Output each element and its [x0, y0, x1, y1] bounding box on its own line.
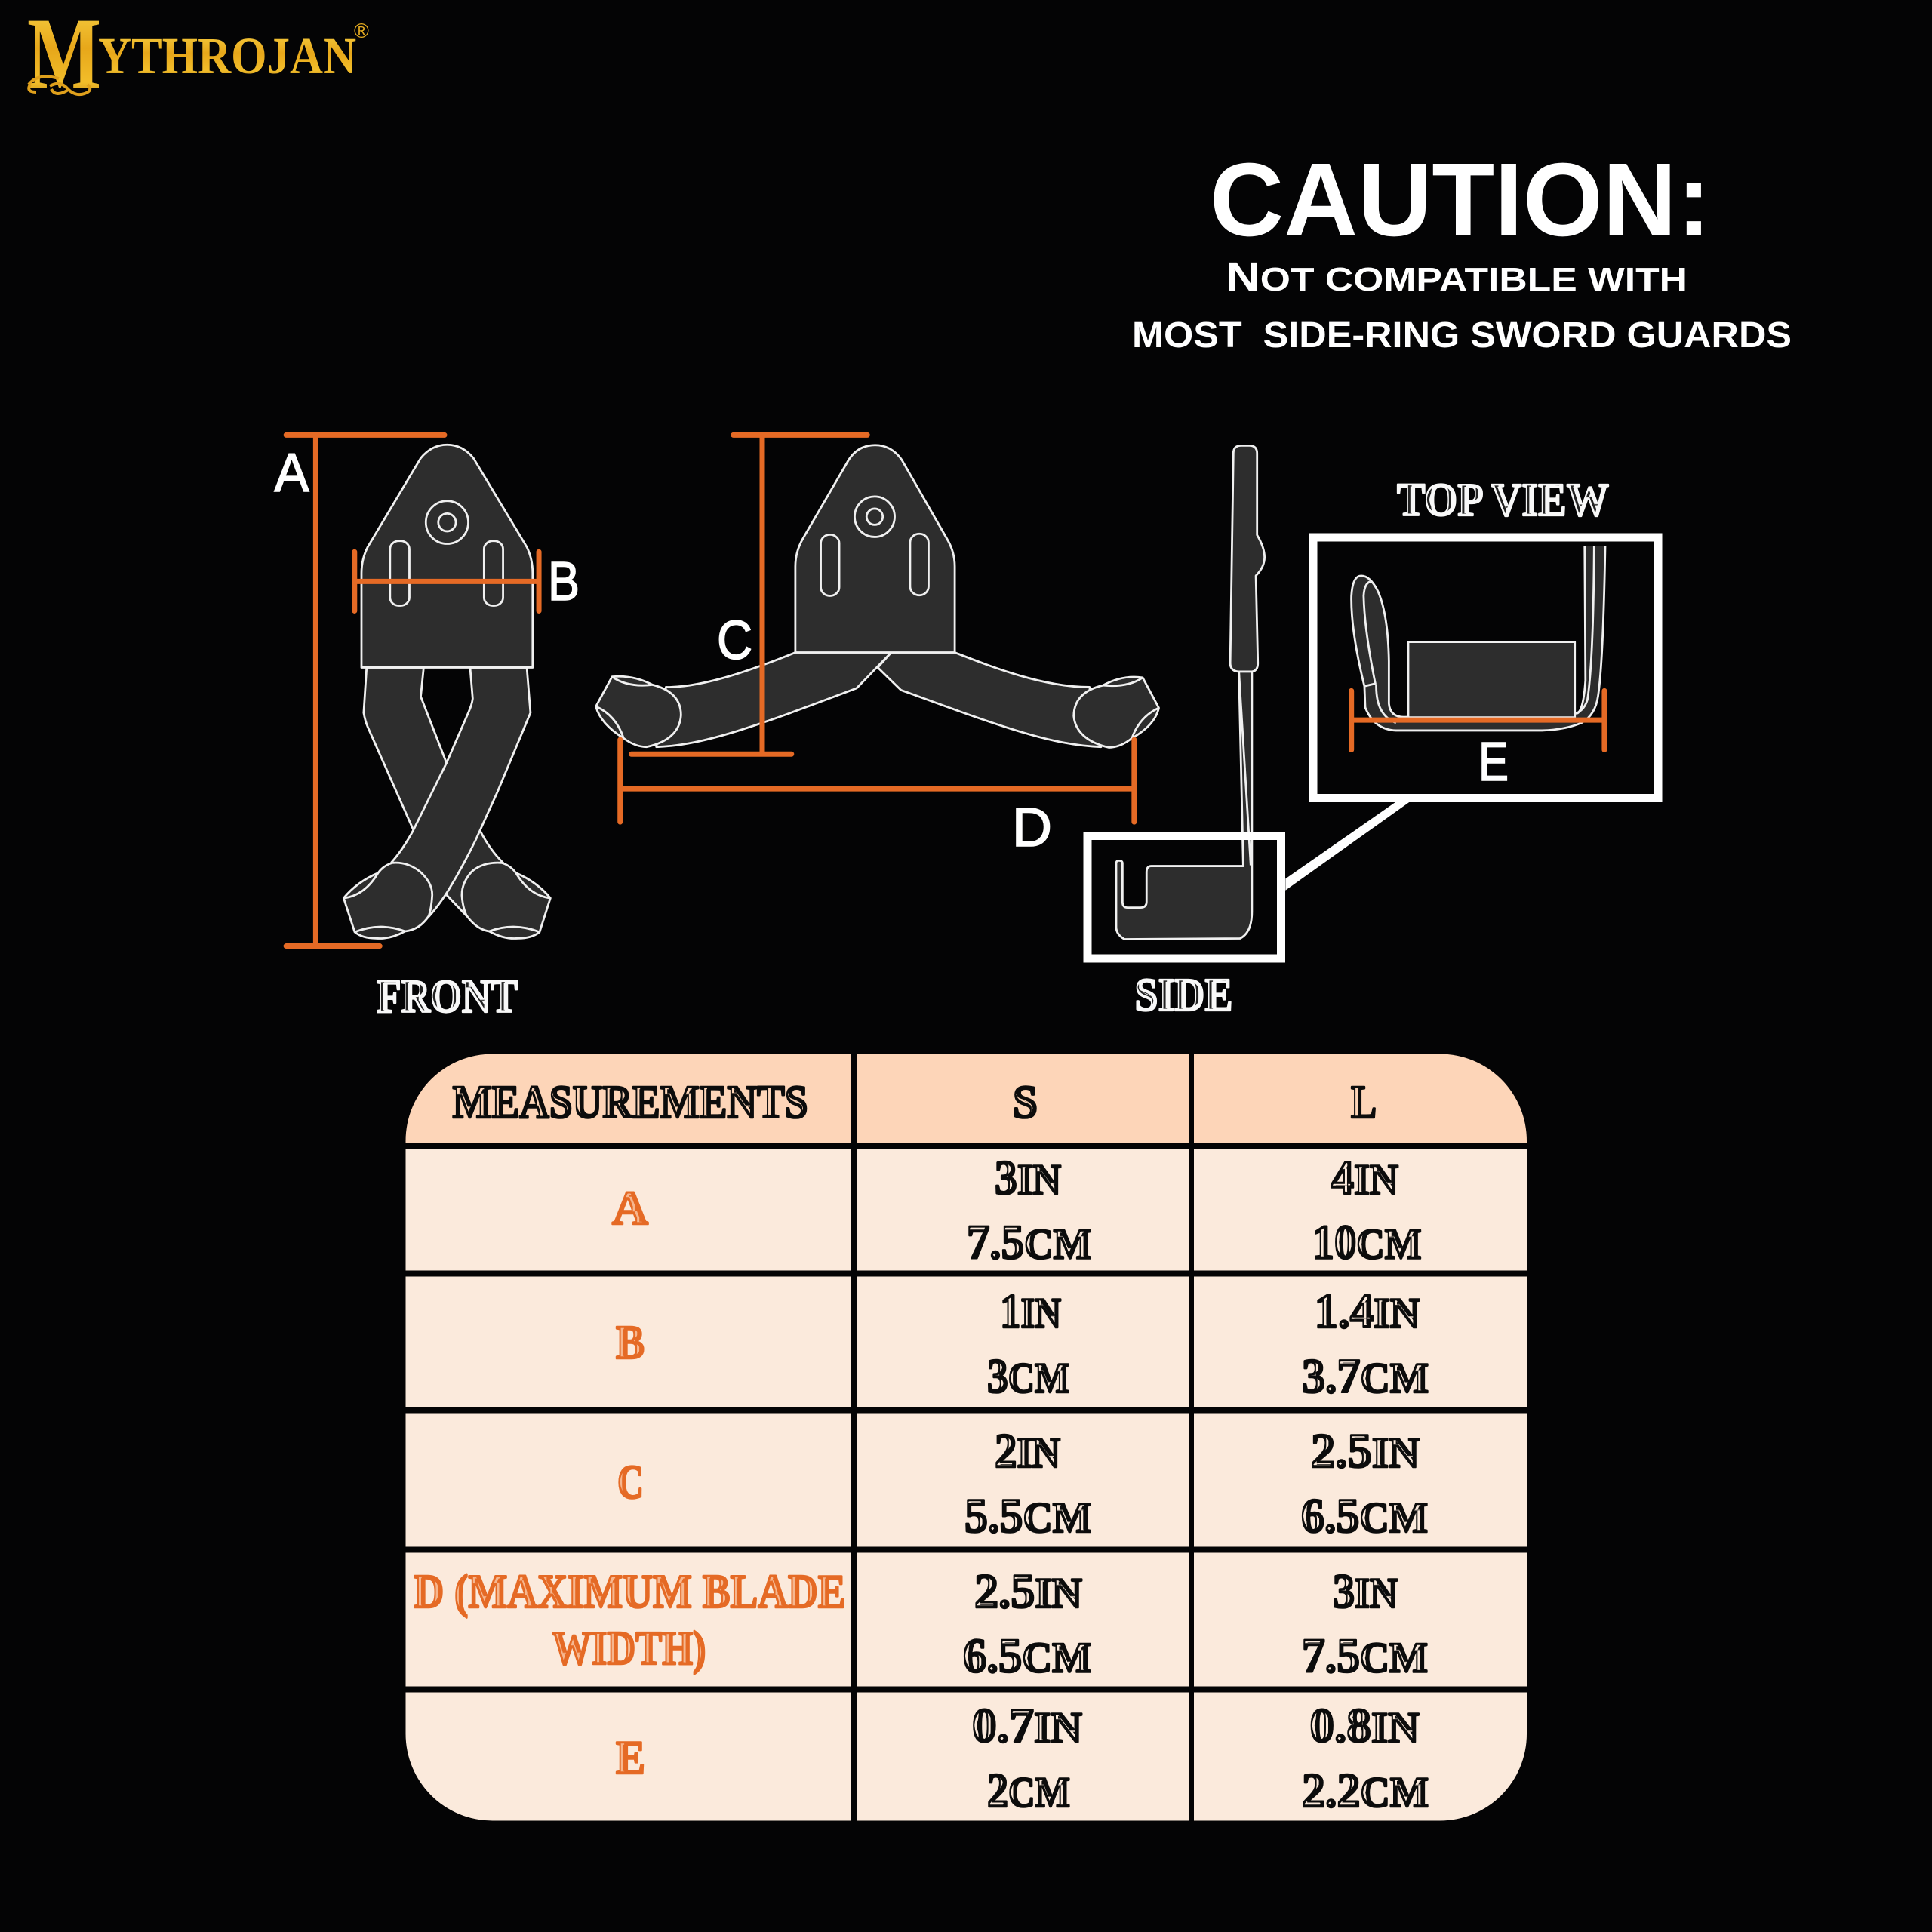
detail box: top view — [1313, 537, 1658, 798]
values: B, S: 1IN — [1000, 1284, 1061, 1339]
values: D, S: 2.5IN — [974, 1564, 1082, 1619]
header: S: S — [1013, 1077, 1038, 1128]
logo: Mythrojan: M — [27, 0, 101, 110]
dimension C — [632, 435, 867, 754]
row label: B: B — [616, 1315, 645, 1369]
row label: E: E — [616, 1730, 645, 1784]
letter D: D — [1012, 798, 1052, 858]
values: E, L — [1302, 1699, 1429, 1818]
values: A, L — [1312, 1151, 1422, 1269]
header: measurements: MEASUREMENTS — [453, 1077, 808, 1128]
right arm — [878, 653, 1101, 747]
values: E, L: 2.2CM — [1302, 1764, 1429, 1818]
left arm — [657, 653, 891, 747]
table: measurements — [405, 1054, 1527, 1822]
left foot — [343, 863, 432, 939]
values: B, S: 3CM — [987, 1349, 1069, 1404]
values: C, L: 2.5IN — [1311, 1424, 1420, 1478]
row label: A: A — [612, 1181, 648, 1235]
logo: Mythrojan: YTHROJAN — [98, 27, 356, 85]
diagram: open view — [596, 435, 1159, 822]
letter A: A — [275, 443, 309, 503]
values: B, L: 1.4IN — [1315, 1284, 1420, 1339]
values: C, S: 2IN — [995, 1424, 1060, 1478]
values: C, L — [1301, 1424, 1428, 1543]
values: D, S: 6.5CM — [963, 1629, 1091, 1683]
caution text line 2: MOST SIDE-RING SWORD GUARDS — [1132, 315, 1792, 355]
values: D, L — [1302, 1564, 1428, 1683]
values: D, S — [963, 1564, 1091, 1683]
back strap — [364, 667, 519, 917]
values: E, S — [972, 1699, 1082, 1818]
values: A, L: 10CM — [1312, 1215, 1422, 1269]
values: E, S: 2CM — [987, 1764, 1070, 1818]
rivet — [854, 497, 895, 537]
values: B, L: 3.7CM — [1302, 1349, 1429, 1404]
logo: Mythrojan — [27, 0, 369, 110]
connector between detail boxes — [1285, 801, 1410, 891]
diagram: front view — [286, 435, 550, 946]
dimension E — [1352, 691, 1604, 749]
letter C: C — [717, 611, 752, 671]
letter E: E — [1478, 732, 1509, 792]
row label: C: C — [617, 1455, 644, 1509]
caution heading: CAUTION: — [1210, 142, 1711, 258]
dimension D — [620, 740, 1134, 822]
values: B, L — [1302, 1284, 1429, 1404]
header: L: L — [1351, 1077, 1377, 1128]
values: D, L: 3IN — [1333, 1564, 1398, 1619]
row label: D: WIDTH) — [552, 1621, 706, 1675]
values: A, S: 3IN — [995, 1151, 1061, 1205]
values: B, S — [987, 1284, 1069, 1404]
diagram: side view and top view — [1116, 445, 1605, 939]
right foot — [462, 863, 550, 939]
letter B: B — [548, 552, 580, 612]
values: D, L: 7.5CM — [1302, 1629, 1428, 1683]
left foot — [596, 676, 681, 747]
values: C, L: 6.5CM — [1301, 1489, 1428, 1543]
slots — [821, 534, 928, 596]
top plate — [795, 445, 955, 653]
row label: D — [414, 1564, 845, 1675]
row label: D: D (MAXIMUM BLADE — [414, 1564, 845, 1618]
dimension B — [355, 552, 539, 611]
dimension A — [286, 435, 445, 946]
caution text line 1: NOT COMPATIBLE WITH — [1226, 254, 1687, 300]
side profile — [1116, 445, 1265, 939]
label: side: SIDE — [1135, 970, 1233, 1021]
slots — [390, 541, 503, 605]
values: C, S — [964, 1424, 1091, 1543]
right foot — [1074, 677, 1159, 747]
values: A, L: 4IN — [1331, 1151, 1398, 1205]
detail box: side — [1088, 836, 1281, 958]
label: top view: TOP VIEW — [1397, 475, 1609, 526]
values: A, S — [967, 1151, 1091, 1269]
values: E, L: 0.8IN — [1310, 1699, 1419, 1753]
values: C, S: 5.5CM — [964, 1489, 1091, 1543]
values: E, S: 0.7IN — [972, 1699, 1082, 1753]
label: front: FRONT — [377, 971, 518, 1023]
top view profile — [1352, 546, 1605, 731]
top plate — [361, 445, 533, 667]
table cells — [405, 1054, 1527, 1822]
values: A, S: 7.5CM — [967, 1215, 1091, 1269]
rivet — [426, 501, 469, 544]
logo: Mythrojan: ® — [354, 20, 369, 42]
front strap — [392, 667, 531, 930]
